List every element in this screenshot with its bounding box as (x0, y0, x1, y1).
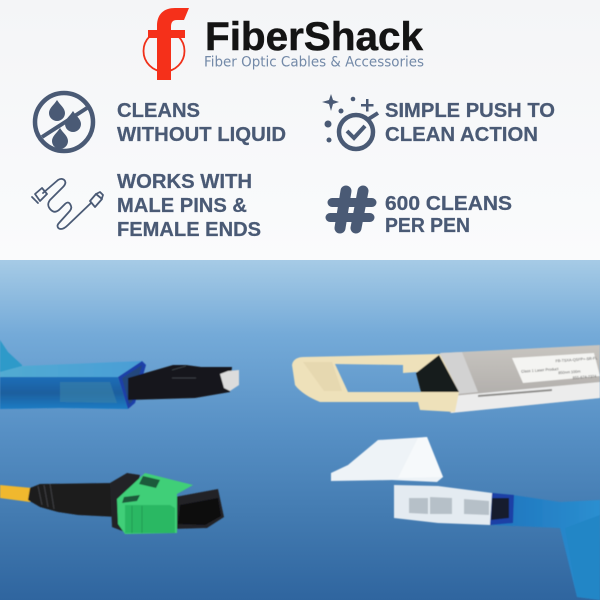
white ferrule tip (220, 370, 239, 391)
black front housing (170, 489, 224, 529)
module silver body (440, 345, 600, 413)
cream pull tab (292, 354, 459, 412)
text: 600 cleans per pen (385, 193, 512, 237)
text: works with male pins and female ends: MALE PINS & (117, 195, 247, 217)
icon: red f logo (144, 8, 189, 80)
product: MPO connector with yellow cable (0, 473, 224, 534)
icon: hash symbol (330, 191, 372, 228)
text: works with male pins and female ends (117, 171, 261, 241)
text: works with male pins and female ends: WORKS WITH (117, 171, 252, 193)
yellow fibre cable (0, 485, 32, 502)
pen blue body (490, 493, 600, 600)
dark blue collar (490, 493, 514, 525)
logo: FiberShack (144, 8, 424, 80)
tagline: Fiber Optic Cables & Accessories (204, 54, 424, 70)
text: simple push to clean action (385, 100, 555, 146)
text: simple push to clean action: SIMPLE PUSH TO (385, 100, 555, 122)
icon: crossed-out water drops (35, 93, 93, 151)
label text: Class 1 Laser Product (521, 367, 560, 374)
text: 600 cleans per pen: PER PEN (385, 215, 470, 237)
bottom blue gradient panel (0, 260, 600, 600)
black connector aperture (416, 355, 459, 392)
white flip cap (331, 437, 443, 482)
label text: FB-TSXA-QSFP+-SR-FL (555, 356, 598, 363)
icon: USB cable (32, 179, 103, 229)
text: works with male pins and female ends: FEMALE ENDS (117, 219, 261, 241)
black flange (110, 473, 140, 532)
product: blue cleaner pen with MPO tip, left (0, 340, 239, 409)
pen handle (0, 340, 22, 378)
black boot (28, 483, 118, 517)
feature: 600 cleans per pen (330, 191, 512, 237)
feature: simple push to clean action (322, 94, 555, 149)
pen body (0, 377, 128, 409)
text: cleans without liquid: WITHOUT LIQUID (117, 124, 286, 146)
white product label (512, 353, 600, 383)
feature: works with male pins and female ends (32, 171, 261, 241)
label text (520, 356, 599, 384)
text: cleans without liquid: CLEANS (117, 100, 200, 122)
feature: cleans without liquid (35, 93, 286, 151)
text: simple push to clean action: CLEAN ACTION (385, 124, 538, 146)
text: 600 cleans per pen: 600 CLEANS (385, 193, 512, 215)
top white panel (0, 0, 600, 260)
black connector (128, 365, 232, 400)
pen top face (0, 361, 142, 377)
label text: 850nm 100m (558, 370, 581, 375)
icon: sparkles and check circle (322, 94, 378, 149)
translucent white body (394, 485, 492, 525)
text: cleans without liquid (117, 100, 286, 146)
brand name: FiberShack (205, 15, 424, 59)
product: blue cleaner pen with clear cap, right (331, 437, 600, 600)
product: QSFP transceiver, right (292, 345, 600, 413)
label text: 855-674-7374 (573, 374, 596, 380)
green clip (117, 473, 193, 534)
